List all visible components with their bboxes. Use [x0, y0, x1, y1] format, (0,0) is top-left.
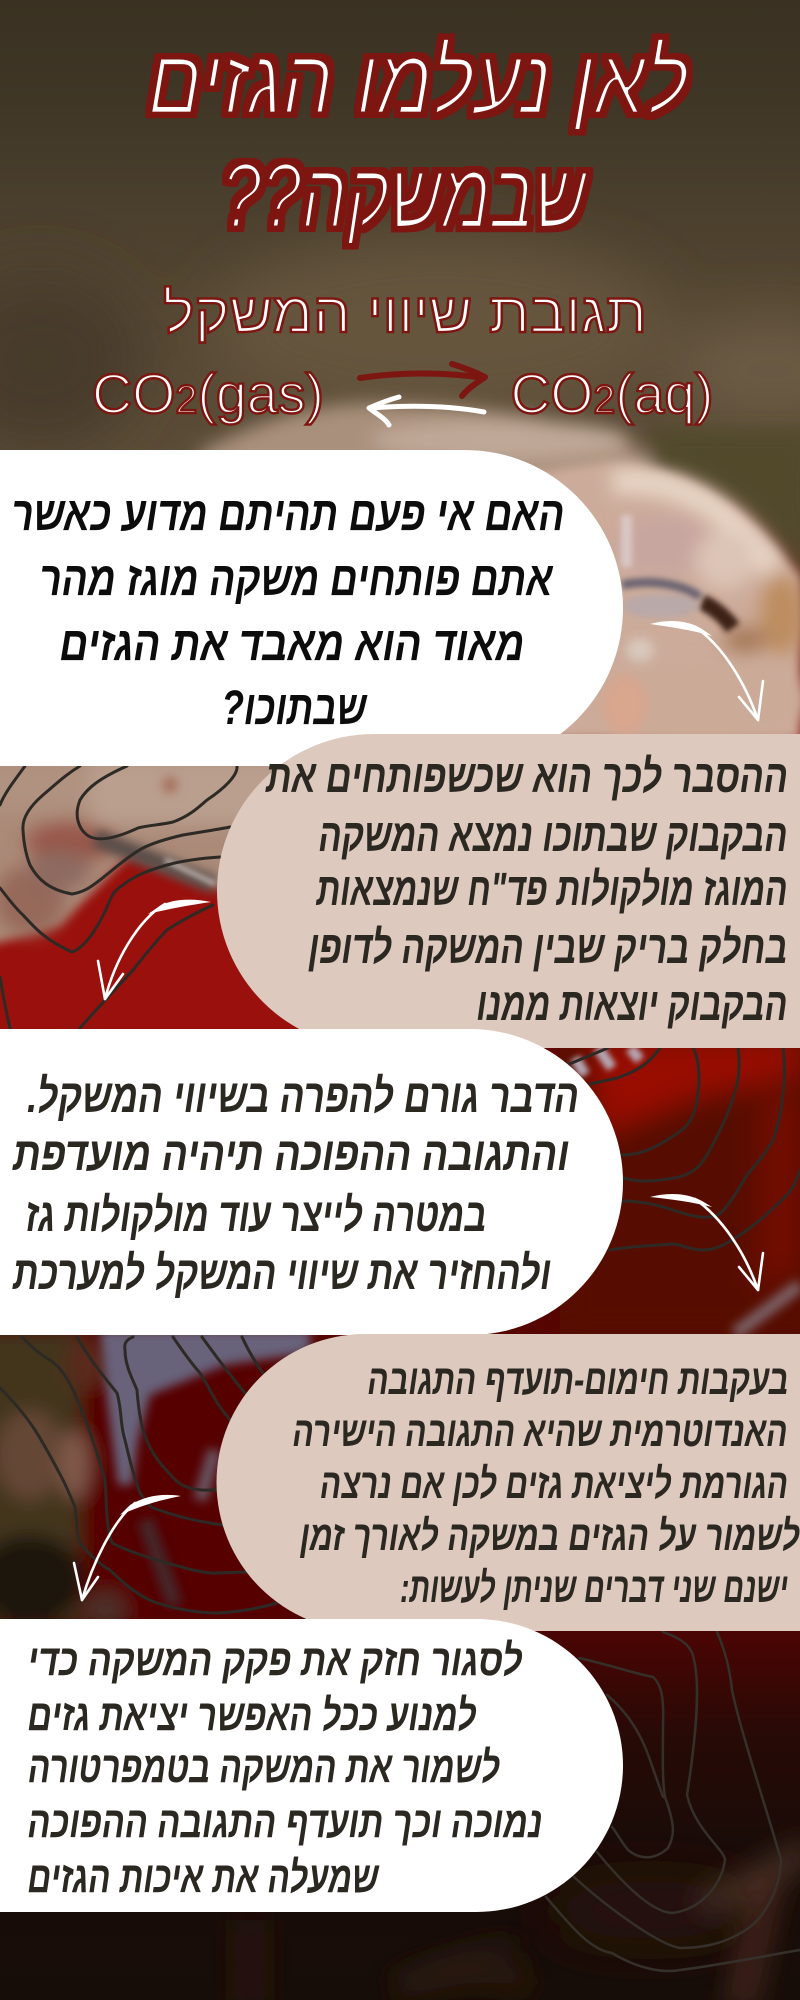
question text: האם אי פעם תהיתם מדוע כאשר: [12, 488, 564, 541]
question text: שבתוכו?: [222, 682, 368, 735]
title: [148, 31, 688, 247]
equilibrium text: הדבר גורם להפרה בשיווי המשקל.: [27, 1069, 579, 1122]
arrow: panel one to two: [650, 621, 763, 720]
actions text: לשמור את המשקה בטמפרטורה: [28, 1743, 500, 1792]
arrow: reverse reaction: [369, 397, 484, 425]
panel: heating effect: [216, 1334, 800, 1631]
panel: disturbance of equilibrium: [0, 1029, 623, 1335]
left section: skin and red bottle: [0, 766, 299, 1029]
panel: two actions: [0, 1619, 623, 1912]
heating text: [292, 1356, 800, 1611]
contour lines: right: [567, 1048, 800, 1250]
equilibrium text: והתגובה ההפוכה תיהיה מועדפת: [12, 1127, 569, 1180]
actions text: לסגור חזק את פקק המשקה כדי: [28, 1636, 522, 1685]
subtitle: equilibrium reaction: תגובת שיווי המשקל: [163, 281, 647, 344]
arrow: panel four to five: [74, 1495, 181, 1600]
equilibrium text: [12, 1069, 579, 1299]
explanation text: [265, 750, 788, 1030]
equilibrium text: ולהחזיר את שיווי המשקל למערכת: [12, 1246, 551, 1299]
contour lines: lower left: [0, 1337, 277, 1613]
question text: [12, 488, 564, 735]
contour lines: upper left: [0, 766, 237, 1028]
equilibrium text: במטרה לייצר עוד מולקולות גז: [26, 1188, 486, 1241]
arrow: panel three to four: [650, 1194, 763, 1290]
actions text: [28, 1636, 542, 1902]
panel: opening question: [0, 450, 623, 766]
title: שבמשקה??: [222, 145, 589, 247]
actions text: שמעלה את איכות הגזים: [28, 1853, 380, 1902]
skin / nose area: [200, 403, 800, 580]
title: לאן נעלמו הגזים: [148, 31, 688, 133]
right section: red bottle: [582, 1048, 800, 1287]
equation: CO2 gas: CO2(gas): [92, 362, 324, 425]
question text: אתם פותחים משקה מוגז מהר: [40, 553, 554, 606]
equation: CO2 aqueous: CO2(aq): [510, 362, 714, 425]
question text: מאוד הוא מאבד את הגזים: [60, 618, 524, 671]
arrow: forward reaction: [360, 364, 485, 396]
actions text: נמוכה וכך תועדף התגובה ההפוכה: [28, 1798, 542, 1847]
arrow: panel two to three: [98, 900, 211, 999]
actions text: למנוע ככל האפשר יציאת גזים: [28, 1691, 476, 1740]
contour lines: lower right: [546, 1632, 800, 1971]
panel: explanation: [217, 734, 800, 1048]
lower left section: [0, 1330, 300, 1630]
